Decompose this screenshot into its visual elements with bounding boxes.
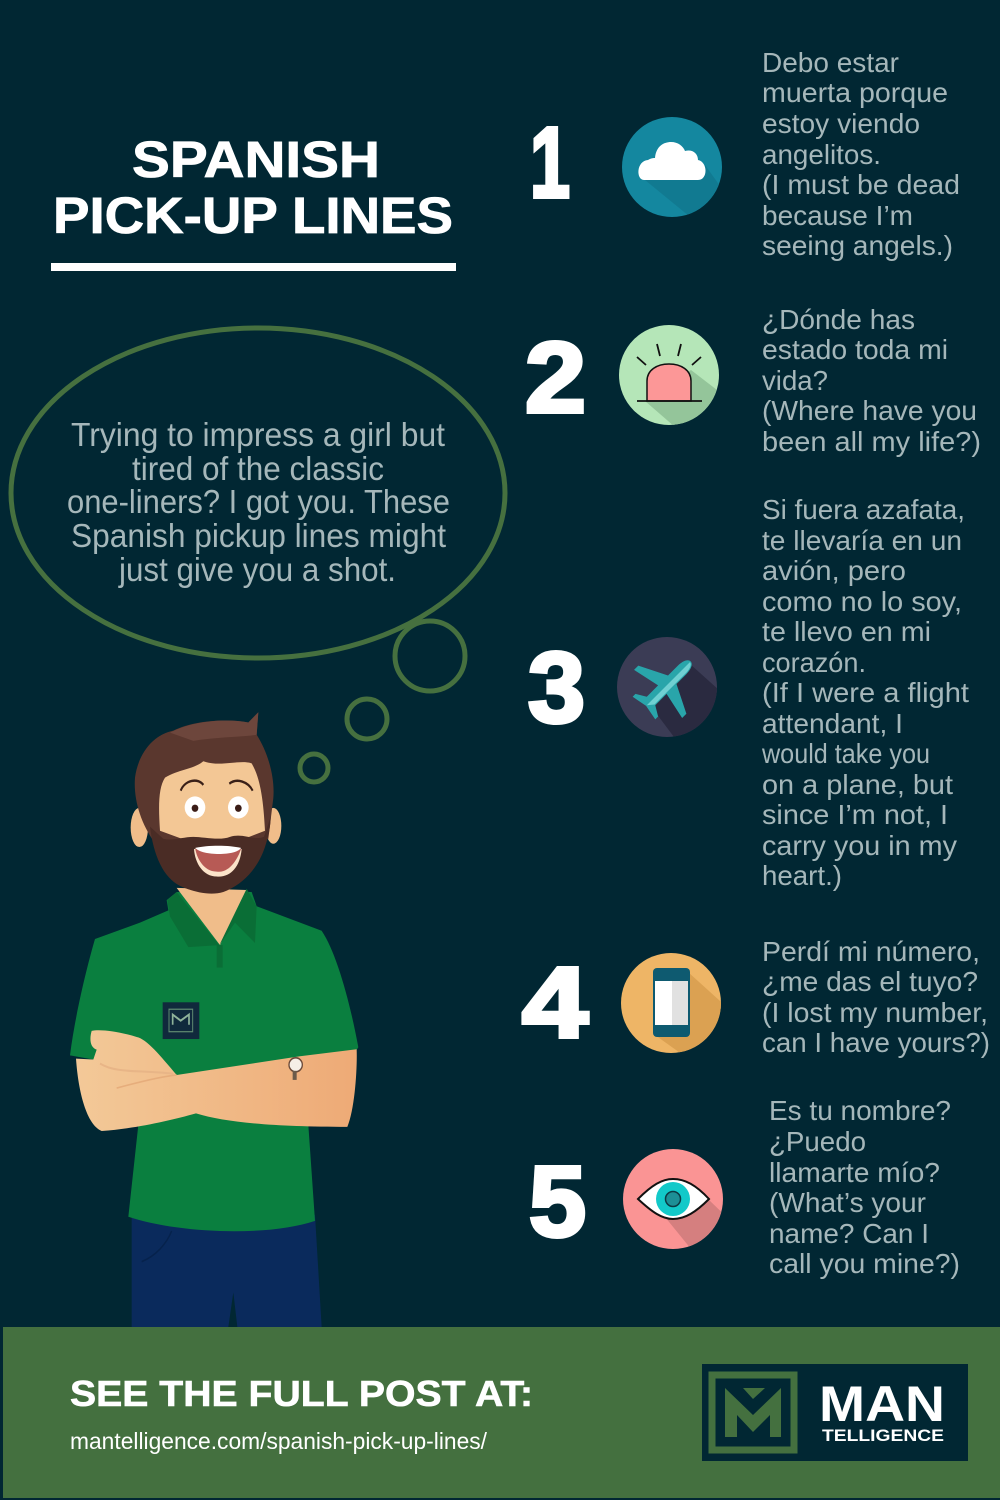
text 4: Perdí mi número, xyxy=(762,936,980,967)
text 3 xyxy=(761,494,969,891)
item 5 xyxy=(529,1095,960,1279)
speech bubble: Trying to impress a girl but xyxy=(71,416,445,453)
icon: siren xyxy=(619,325,719,425)
text 3: would take you xyxy=(761,738,930,769)
item 3 xyxy=(528,494,969,891)
text 2 xyxy=(762,304,981,457)
item 1 xyxy=(530,47,960,261)
text 1: angelitos. xyxy=(762,139,881,170)
icon: phone xyxy=(621,953,721,1053)
text 3: avión, pero xyxy=(762,555,906,586)
text 5: call you mine?) xyxy=(769,1248,960,1279)
text 1: muerta porque xyxy=(762,77,948,108)
speech bubble xyxy=(11,328,505,782)
text 3: (If I were a flight xyxy=(762,677,969,708)
text 3: Si fuera azafata, xyxy=(762,494,965,525)
text 4: ¿me das el tuyo? xyxy=(762,966,978,997)
text 4: (I lost my number, xyxy=(762,997,988,1028)
text 4: can I have yours?) xyxy=(762,1027,990,1058)
text 4 xyxy=(762,936,990,1058)
text 3: te llevo en mi xyxy=(762,616,931,647)
text 5: name? Can I xyxy=(769,1218,929,1249)
text 5 xyxy=(769,1095,960,1279)
text 1: Debo estar xyxy=(762,47,899,78)
text 5: (What’s your xyxy=(769,1187,926,1218)
text 3: attendant, I xyxy=(762,708,903,739)
text 2: (Where have you xyxy=(762,395,977,426)
number 3: 3 xyxy=(528,632,585,744)
number 1: 1 xyxy=(530,107,570,219)
logo: MAN xyxy=(819,1376,945,1432)
footer heading: SEE THE FULL POST AT: xyxy=(70,1373,533,1414)
item 2 xyxy=(525,304,981,457)
icon: cloud xyxy=(622,117,722,217)
title xyxy=(51,131,456,271)
icon: eye xyxy=(623,1149,723,1249)
text 2: ¿Dónde has xyxy=(762,304,915,335)
item 4 xyxy=(522,936,990,1060)
footer url: mantelligence.com/spanish-pick-up-lines/ xyxy=(70,1428,488,1454)
logo xyxy=(702,1364,968,1461)
text 3: heart.) xyxy=(762,860,842,891)
text 2: vida? xyxy=(762,365,828,396)
speech bubble: tired of the classic xyxy=(132,450,384,487)
text 1: because I’m xyxy=(762,200,913,231)
title: PICK-UP LINES xyxy=(53,187,453,244)
text 3: on a plane, but xyxy=(762,769,953,800)
text 1 xyxy=(762,47,960,261)
text 1: estoy viendo xyxy=(762,108,920,139)
speech bubble: one-liners? I got you. These xyxy=(67,483,450,520)
speech bubble: just give you a shot. xyxy=(118,551,396,588)
title: SPANISH xyxy=(132,131,380,188)
text 1: (I must be dead xyxy=(762,169,960,200)
character: bearded man in green polo xyxy=(70,712,358,1327)
logo: TELLIGENCE xyxy=(822,1426,944,1445)
text 5: llamarte mío? xyxy=(769,1157,940,1188)
speech bubble: Spanish pickup lines might xyxy=(71,517,446,554)
text 1: seeing angels.) xyxy=(762,230,953,261)
text 2: estado toda mi xyxy=(762,334,948,365)
text 5: Es tu nombre? xyxy=(769,1095,951,1126)
text 3: carry you in my xyxy=(762,830,957,861)
text 3: te llevaría en un xyxy=(762,525,962,556)
icon: airplane xyxy=(617,637,717,737)
footer panel xyxy=(3,1327,1000,1498)
text 3: since I’m not, I xyxy=(762,799,948,830)
text 2: been all my life?) xyxy=(762,426,981,457)
text 3: como no lo soy, xyxy=(762,586,962,617)
text 3: corazón. xyxy=(762,647,866,678)
number 2: 2 xyxy=(525,322,586,434)
text 5: ¿Puedo xyxy=(769,1126,866,1157)
number 5: 5 xyxy=(529,1146,586,1258)
number 4: 4 xyxy=(522,947,588,1059)
